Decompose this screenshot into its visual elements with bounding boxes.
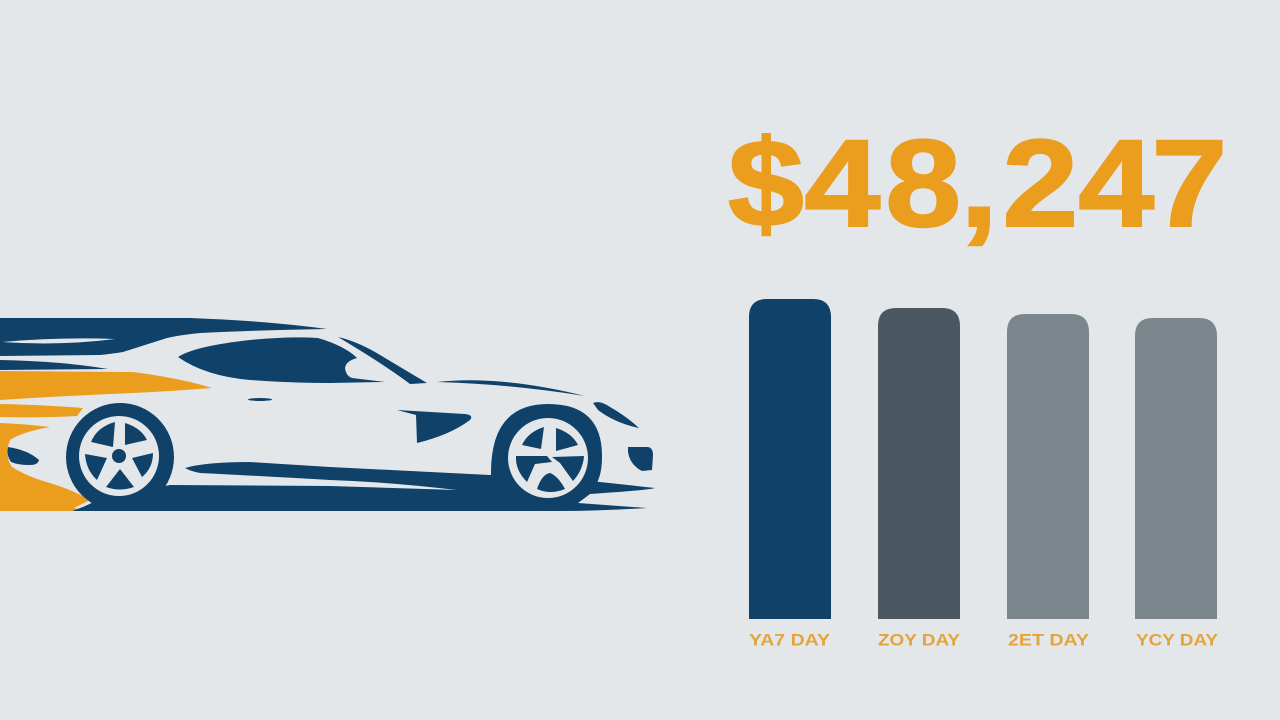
front wheel	[491, 404, 602, 508]
windshield pillar	[338, 337, 427, 384]
hood line	[437, 380, 585, 396]
door handle	[248, 398, 272, 401]
car window	[178, 337, 385, 383]
side vent	[397, 410, 471, 443]
bar 3	[1007, 314, 1089, 619]
rear wheel	[66, 403, 174, 511]
car illustration	[0, 318, 655, 511]
bar labels: YCY DAY	[1136, 630, 1219, 650]
bar 2	[878, 308, 960, 619]
bar labels: ZOY DAY	[878, 630, 961, 650]
bar labels	[749, 630, 1219, 650]
bar 4	[1135, 318, 1217, 619]
bar 1	[749, 299, 831, 619]
bar chart	[749, 299, 1219, 650]
car underbody and sill	[72, 462, 655, 511]
front lamp	[628, 447, 653, 471]
headline figure: $48,247	[728, 114, 1227, 253]
headlight	[593, 402, 639, 428]
bar labels: 2ET DAY	[1008, 630, 1090, 650]
navy speed streaks	[0, 318, 327, 465]
orange speed streaks	[0, 371, 212, 511]
bar labels: YA7 DAY	[749, 630, 831, 650]
